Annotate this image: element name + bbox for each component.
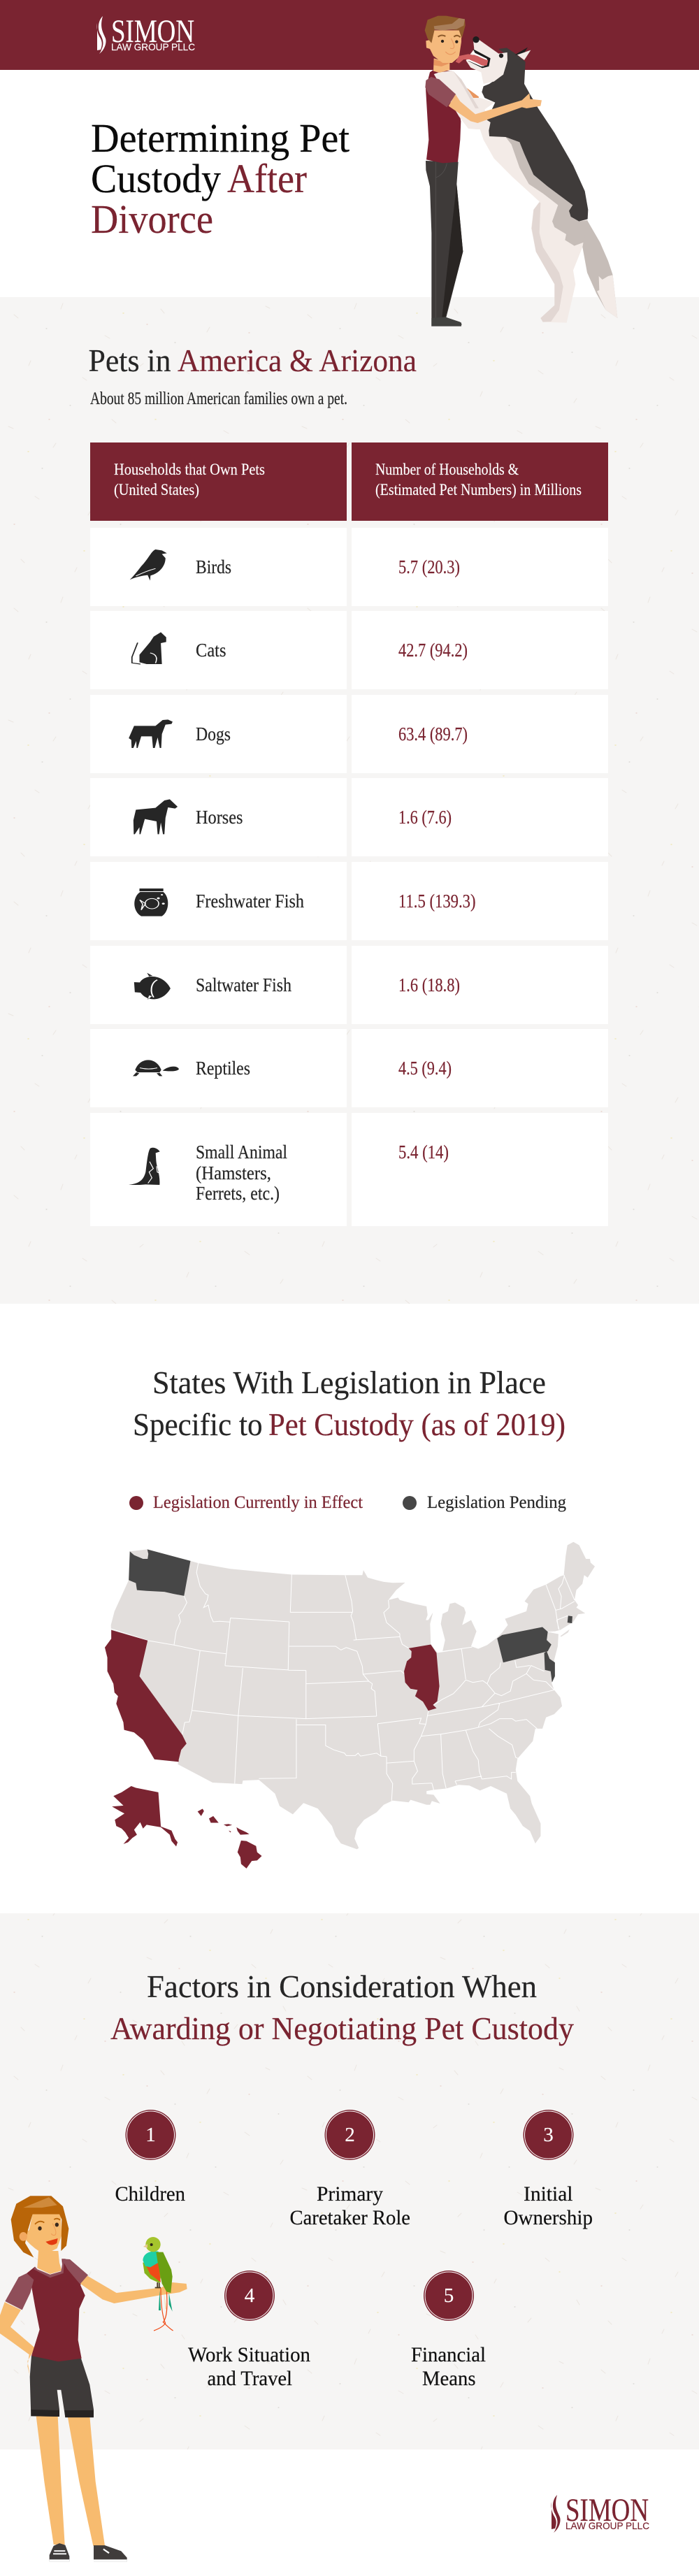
map: alaska xyxy=(112,1786,178,1846)
icon: saltwater fish xyxy=(134,973,171,1000)
map: long island xyxy=(559,1627,571,1637)
dog tail xyxy=(582,220,617,318)
factor 4: work situation and travel: Work Situation xyxy=(188,2343,310,2366)
woman face xyxy=(23,2215,62,2255)
icon: horse xyxy=(134,799,178,834)
icon: turtle xyxy=(133,1060,179,1076)
factor 2: primary caretaker role: Primary xyxy=(317,2182,383,2206)
man trousers xyxy=(426,161,463,326)
row: horses: 1.6 (7.6) xyxy=(398,807,452,828)
row: dogs: 63.4 (89.7) xyxy=(398,724,468,744)
woman neck xyxy=(37,2251,62,2274)
row: reptiles xyxy=(90,1029,608,1107)
heading: pets in america and arizona: America & Arizona xyxy=(178,343,417,378)
heading: states with legislation: Specific to xyxy=(133,1406,263,1442)
heading: states with legislation: States With Legislation in Place xyxy=(152,1365,546,1400)
table header right: Number of Households & xyxy=(375,461,519,478)
row: dogs: Dogs xyxy=(196,724,231,744)
woman shoes xyxy=(50,2543,127,2561)
illustration: woman with parrot xyxy=(0,2196,187,2561)
row: horses xyxy=(90,778,608,856)
text: intro sentence: About 85 million American families own a pet. xyxy=(90,389,347,408)
row: small animal: (Hamsters, xyxy=(196,1163,271,1183)
factor 1: children: Children xyxy=(115,2182,185,2206)
factor 5: financial means: Means xyxy=(422,2367,475,2390)
row: reptiles: Reptiles xyxy=(196,1058,250,1079)
logo: footer: SIMON xyxy=(565,2492,649,2528)
icon: meerkat xyxy=(129,1148,160,1185)
heading: pets in america and arizona xyxy=(88,343,417,378)
man facial features xyxy=(438,35,461,55)
map: new jersey delaware area xyxy=(545,1651,555,1683)
title: Custody xyxy=(91,156,221,201)
row: small animal: Ferrets, etc.) xyxy=(196,1183,280,1204)
row: birds xyxy=(90,528,608,606)
map: pennsylvania xyxy=(497,1627,552,1662)
map: washington xyxy=(129,1549,190,1596)
dog face xyxy=(466,38,507,84)
parrot teal chest xyxy=(143,2251,159,2267)
factor 4: work situation and travel: 4 xyxy=(245,2284,255,2307)
map: rhode island xyxy=(568,1616,572,1623)
man hair xyxy=(425,16,466,43)
factor 3: initial ownership: Ownership xyxy=(503,2206,593,2229)
heading: states with legislation xyxy=(133,1365,565,1442)
man far arm xyxy=(466,87,479,105)
map: illinois xyxy=(404,1644,440,1711)
row: cats xyxy=(90,611,608,689)
logo: footer xyxy=(552,2492,649,2533)
parrot wing xyxy=(156,2252,173,2293)
heading: states with legislation: Pet Custody (as of 2019) xyxy=(268,1406,565,1442)
factor 3: initial ownership xyxy=(503,2110,593,2229)
table header left xyxy=(90,442,347,521)
parrot feet xyxy=(155,2282,161,2288)
parrot head xyxy=(145,2237,161,2252)
factor 2: primary caretaker role: Caretaker Role xyxy=(289,2206,410,2229)
parrot green underside xyxy=(143,2263,162,2283)
man shirt xyxy=(426,70,461,163)
icon: logo swirl xyxy=(97,16,106,54)
woman sleeves xyxy=(5,2259,88,2310)
logo: header xyxy=(97,13,195,54)
panel: paper section pets xyxy=(0,297,699,1304)
panel: paper section factors xyxy=(0,1913,699,2449)
table header right xyxy=(352,442,608,521)
map: state borders xyxy=(111,1563,575,1801)
icon: bird xyxy=(130,549,167,581)
woman hair xyxy=(11,2196,69,2257)
parrot orange belly xyxy=(145,2263,161,2282)
factor 3: initial ownership: Initial xyxy=(524,2182,573,2206)
woman shirt xyxy=(27,2259,86,2361)
heading: factors in consideration xyxy=(110,1969,574,2046)
legend item: in effect: Legislation Currently in Effect xyxy=(153,1493,363,1512)
factor 2: primary caretaker role: 2 xyxy=(345,2124,355,2146)
row: small animal: Small Animal xyxy=(196,1142,287,1163)
table header left: Households that Own Pets xyxy=(114,461,265,478)
woman legs xyxy=(36,2416,105,2546)
map: california xyxy=(105,1630,187,1762)
parrot tail feathers xyxy=(159,2291,173,2312)
factor 5: financial means xyxy=(411,2271,486,2390)
dog grey band xyxy=(505,137,588,246)
legend item: pending: Legislation Pending xyxy=(427,1493,566,1512)
factor 5: financial means: Financial xyxy=(411,2343,486,2366)
logo: header: LAW GROUP PLLC xyxy=(111,41,195,52)
table header left: (United States) xyxy=(114,481,199,498)
map: hawaii xyxy=(198,1808,261,1869)
heading: factors in consideration: Factors in Consideration When xyxy=(147,1969,537,2004)
row: small animal xyxy=(90,1113,608,1226)
factor 4: work situation and travel xyxy=(188,2271,310,2390)
row: cats: Cats xyxy=(196,640,226,661)
icon: footer logo swirl xyxy=(552,2495,561,2533)
factor 1: children: 1 xyxy=(145,2124,156,2146)
woman features xyxy=(20,2219,60,2245)
icon: cat xyxy=(132,632,166,664)
logo: header: SIMON xyxy=(111,13,194,50)
title: After xyxy=(227,156,307,201)
row: saltwater fish xyxy=(90,946,608,1024)
dog dark coat xyxy=(482,48,588,222)
row: freshwater fish: 11.5 (139.3) xyxy=(398,891,475,912)
heading: pets in america and arizona: Pets in xyxy=(88,343,171,378)
title: Determining Pet xyxy=(91,115,350,161)
icon: fish bowl xyxy=(134,888,168,916)
man neck and face xyxy=(433,58,449,73)
row: small animal: 5.4 (14) xyxy=(398,1142,449,1163)
header band xyxy=(0,0,699,70)
row: saltwater fish: 1.6 (18.8) xyxy=(398,974,460,995)
table header right: (Estimated Pet Numbers) in Millions xyxy=(375,481,582,498)
dog mouth and tongue xyxy=(468,49,491,68)
icon: dog xyxy=(129,719,173,748)
title: Divorce xyxy=(91,196,213,242)
row: saltwater fish: Saltwater Fish xyxy=(196,974,291,995)
row: freshwater fish: Freshwater Fish xyxy=(196,891,304,912)
woman shorts xyxy=(30,2356,94,2417)
legend xyxy=(129,1493,566,1512)
row: horses: Horses xyxy=(196,807,243,828)
logo: footer: LAW GROUP PLLC xyxy=(565,2520,649,2531)
row: birds: 5.7 (20.3) xyxy=(398,556,460,577)
man sleeve xyxy=(425,77,456,107)
factor 2: primary caretaker role xyxy=(289,2110,410,2229)
dog ear xyxy=(515,48,528,55)
dog front leg xyxy=(434,71,494,138)
heading: factors in consideration: Awarding or Negotiating Pet Custody xyxy=(110,2010,574,2046)
row: reptiles: 4.5 (9.4) xyxy=(398,1058,452,1079)
factor 5: financial means: 5 xyxy=(444,2284,454,2307)
row: dogs xyxy=(90,695,608,773)
factor 3: initial ownership: 3 xyxy=(543,2124,554,2146)
map: united states xyxy=(105,1542,595,1869)
row: cats: 42.7 (94.2) xyxy=(398,640,468,661)
woman outstretched arm xyxy=(80,2276,187,2303)
woman rear arm and hand xyxy=(0,2302,35,2375)
man near arm xyxy=(449,93,542,123)
illustration: man hugging husky xyxy=(425,16,617,326)
title xyxy=(91,115,350,242)
dog hind leg shade xyxy=(532,202,563,322)
map: contiguous landmass xyxy=(105,1542,595,1849)
dog body white xyxy=(480,126,587,323)
row: birds: Birds xyxy=(196,556,231,577)
factor 4: work situation and travel: and Travel xyxy=(207,2367,292,2390)
row: freshwater fish xyxy=(90,862,608,940)
factor 1: children xyxy=(115,2110,185,2206)
parrot xyxy=(143,2237,173,2331)
